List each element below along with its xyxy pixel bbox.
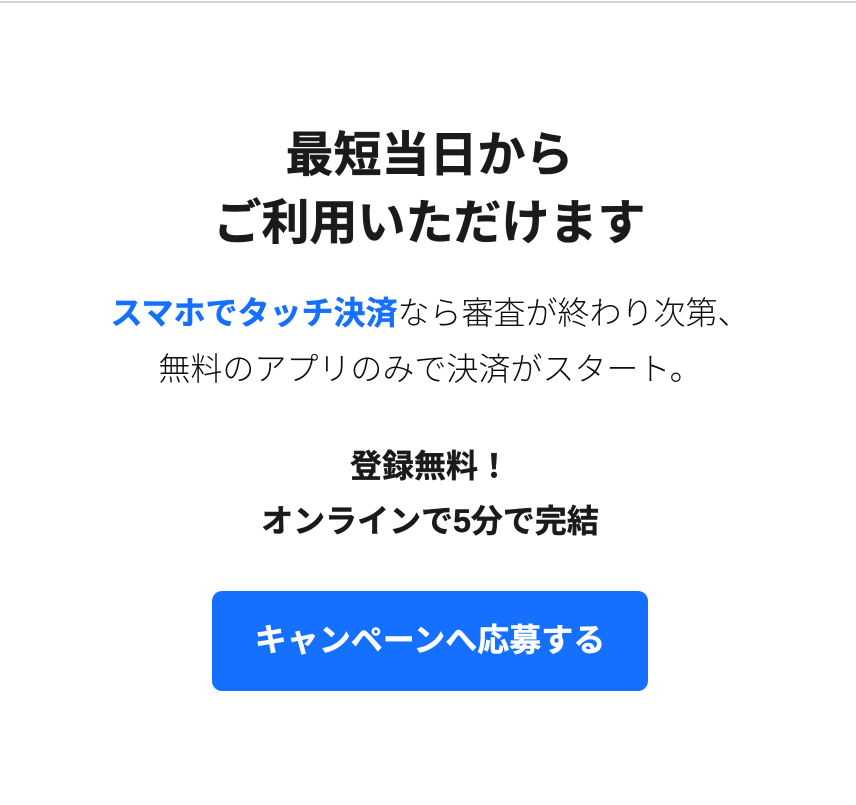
description text: スマホでタッチ決済なら審査が終わり次第、 (110, 295, 750, 331)
description text (110, 295, 750, 387)
registration note (261, 448, 599, 539)
top border line (0, 1, 856, 3)
campaign button (212, 591, 648, 691)
title: ご利用いただけます (213, 197, 646, 250)
description text: 無料のアプリのみで決済がスタート。 (158, 351, 702, 387)
campaign button: キャンペーンへ応募する (255, 622, 605, 658)
title: 最短当日から (285, 129, 574, 182)
title (213, 129, 646, 250)
registration note: 登録無料！ (350, 448, 510, 484)
registration note: オンラインで5分で完結 (261, 503, 599, 539)
